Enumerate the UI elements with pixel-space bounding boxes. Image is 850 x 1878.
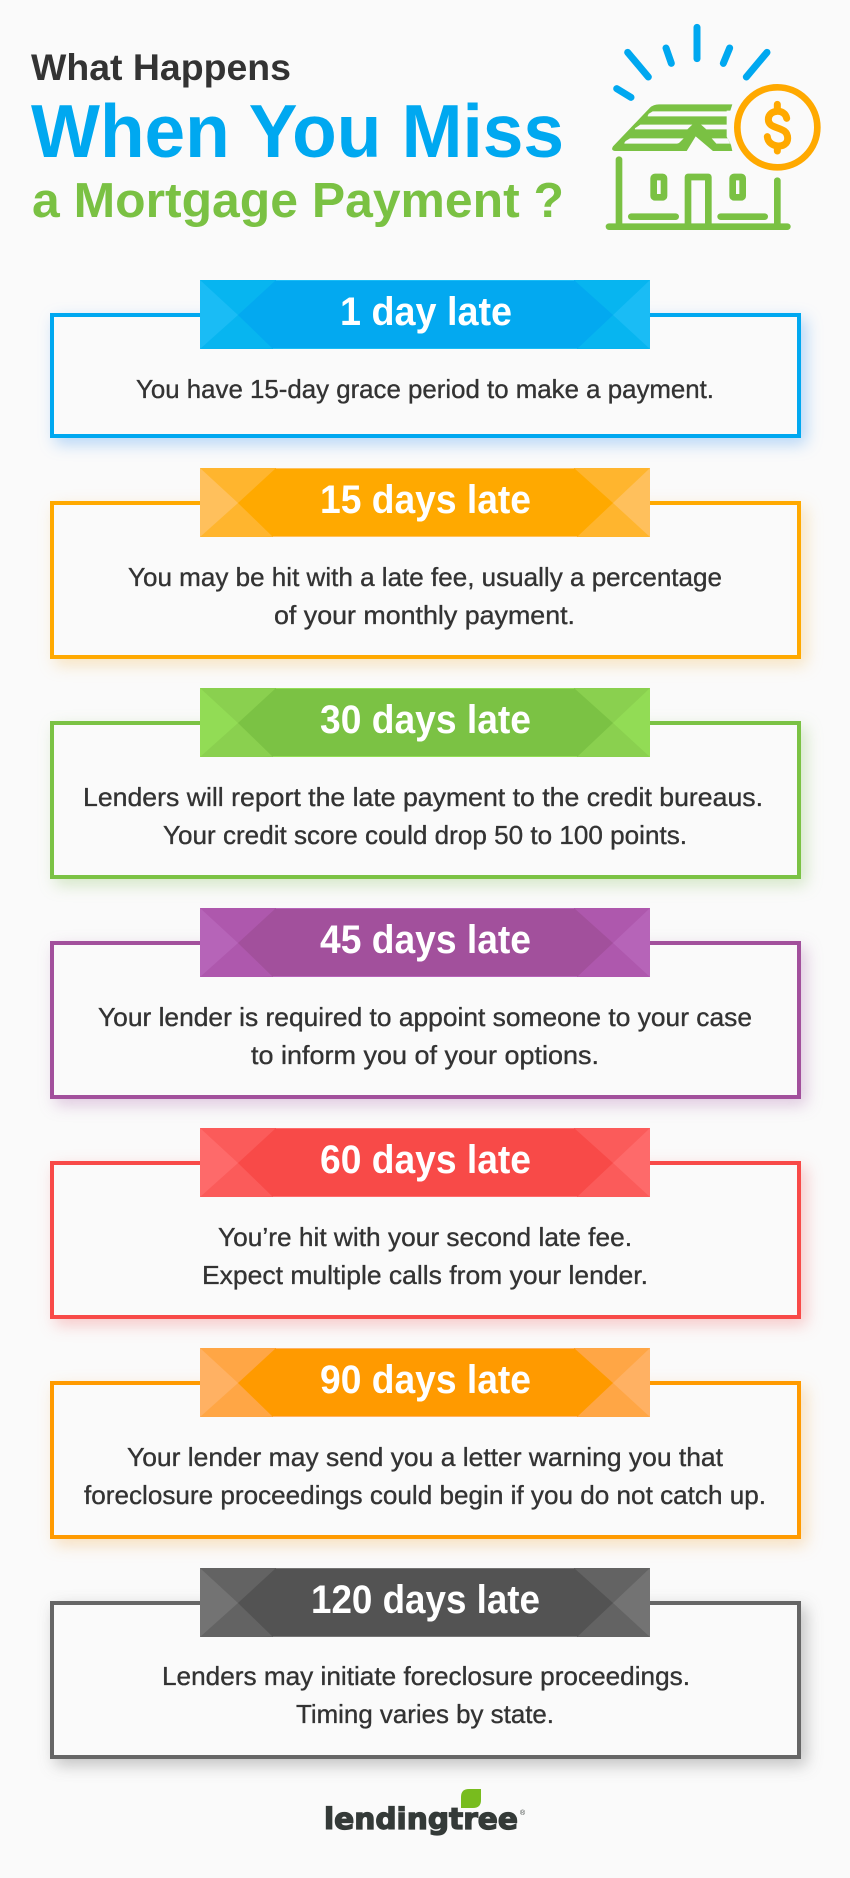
body text xyxy=(128,562,722,630)
body text: Your lender is required to appoint someone to your case xyxy=(98,1002,752,1032)
body text xyxy=(162,1661,690,1729)
title line 3: a Mortgage Payment ? xyxy=(32,174,564,228)
body text: Your lender may send you a letter warning you that xyxy=(127,1442,724,1472)
body text: Your credit score could drop 50 to 100 points. xyxy=(163,820,687,850)
body text: to inform you of your options. xyxy=(251,1040,599,1070)
body text xyxy=(98,1002,752,1070)
title xyxy=(31,47,564,228)
banner: 90 days late: 90 days late xyxy=(320,1358,531,1402)
icon: roof xyxy=(612,104,732,152)
body text: You’re hit with your second late fee. xyxy=(218,1222,632,1252)
logo leaf xyxy=(461,1789,481,1808)
title line 2: When You Miss xyxy=(31,89,564,173)
body text: Lenders will report the late payment to the credit bureaus. xyxy=(83,782,763,812)
body text: Expect multiple calls from your lender. xyxy=(202,1260,648,1290)
body text: of your monthly payment. xyxy=(274,600,575,630)
panel: 15 days late xyxy=(52,468,799,657)
body text: Timing varies by state. xyxy=(296,1699,554,1729)
banner: 90 days late xyxy=(200,1348,650,1417)
panel: 60 days late xyxy=(52,1128,799,1317)
banner: 60 days late xyxy=(200,1128,650,1197)
banner: 120 days late: 120 days late xyxy=(311,1578,540,1622)
banner: 60 days late: 60 days late xyxy=(320,1138,531,1182)
body text xyxy=(83,782,763,850)
panel: 45 days late xyxy=(52,908,799,1097)
banner: 45 days late xyxy=(200,908,650,977)
panel: 120 days late xyxy=(52,1568,799,1757)
logo wordmark: lendingtree xyxy=(324,1802,518,1836)
body text xyxy=(202,1222,648,1290)
body text xyxy=(84,1442,766,1510)
banner: 45 days late: 45 days late xyxy=(320,918,531,962)
banner: 30 days late: 30 days late xyxy=(320,698,531,742)
panel: 90 days late xyxy=(52,1348,799,1537)
banner: 15 days late: 15 days late xyxy=(320,478,531,522)
banner: 15 days late xyxy=(200,468,650,537)
icon: house with dollar coin xyxy=(609,27,817,227)
logo: lendingtree xyxy=(324,1789,526,1836)
banner: 1 day late: 1 day late xyxy=(340,290,512,334)
body text: Lenders may initiate foreclosure proceedings. xyxy=(162,1661,690,1691)
logo registered mark: ® xyxy=(520,1809,526,1817)
icon: rays xyxy=(617,27,767,97)
title line 1: What Happens xyxy=(31,47,291,88)
banner: 1 day late xyxy=(200,280,650,349)
body text: foreclosure proceedings could begin if you do not catch up. xyxy=(84,1480,766,1510)
banner: 30 days late xyxy=(200,688,650,757)
panel: 30 days late xyxy=(52,688,799,877)
body text: You may be hit with a late fee, usually a percentage xyxy=(128,562,722,592)
banner: 120 days late xyxy=(200,1568,650,1637)
icon: house walls xyxy=(609,160,787,227)
icon: coin xyxy=(737,87,817,167)
body text: You have 15-day grace period to make a payment. xyxy=(136,374,714,404)
panel: 1 day late xyxy=(52,280,799,436)
